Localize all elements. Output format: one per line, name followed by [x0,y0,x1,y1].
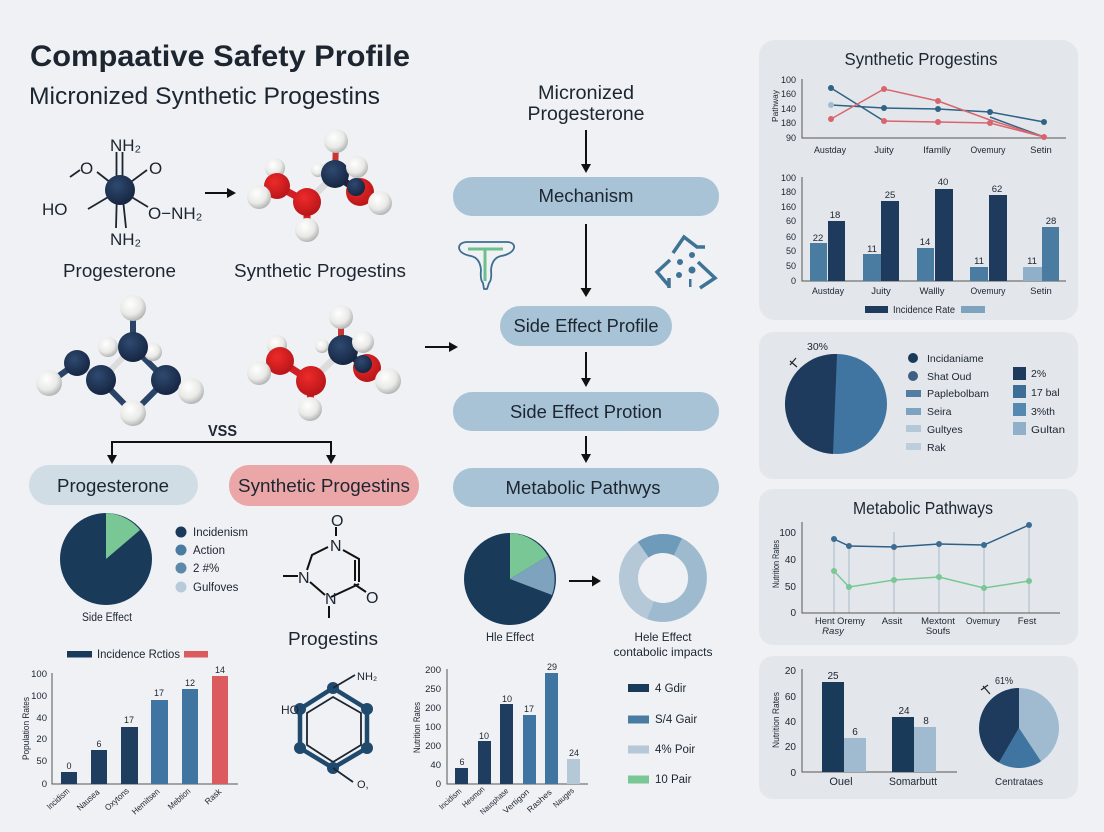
panel: metabolic pathways [759,489,1078,645]
bar chart: 11 [974,256,984,267]
heading: Synthetic Progestins [844,49,998,69]
label: micronized progesterone: Micronized [538,83,634,104]
bar chart: center: 10 [502,694,512,704]
vss branching arrows: VSS [208,423,237,440]
bar chart: center: 10 [479,731,489,741]
legend: side effect: Action [193,545,225,557]
title [29,40,410,110]
vss branching arrows [107,423,336,464]
title: Compaative Safety Profile [30,40,410,73]
pill: synthetic progestins [229,465,419,506]
bar chart: incidence ratios: 0 [42,779,47,790]
bar chart: Nutrition Rates [771,692,781,748]
line chart: Assit [882,616,903,627]
pie chart: hle effect [464,533,556,644]
molecule: ring structure: O [331,513,343,530]
bar chart: 22 [813,233,823,244]
bar chart: 60 [785,692,796,703]
pill: metabolic pathways: Metabolic Pathwys [506,477,660,498]
line chart: Mextont [921,616,955,627]
pill: side effect protion: Side Effect Protion [510,401,662,422]
bar chart: center [412,662,588,816]
arrow: to side effect profile [425,342,458,352]
line chart: 140 [781,104,796,114]
pill: progesterone: Progesterone [57,475,169,496]
molecule: ring structure [283,513,378,618]
panel: bottom right [759,656,1078,799]
bar chart: 14 [920,237,930,248]
molecule: synthetic progestin 3D top [247,129,392,242]
line chart: 0 [790,608,796,619]
molecule: ring structure: N [298,570,310,587]
bar chart: 20 [785,666,796,677]
legend: side effect [176,526,248,594]
molecule: progesterone formula: NH₂ [110,230,141,249]
line chart: Rasy [822,626,845,637]
bar chart: incidence ratios: Nausea [75,787,102,812]
bar chart: 60 [786,232,796,242]
line chart: Juity [874,145,894,156]
bar chart: center: 17 [524,704,534,714]
bar chart: 11 [867,244,877,255]
pie chart [785,342,887,454]
line chart [771,522,1060,637]
bar chart: center: Incidism [437,787,464,811]
molecule: progesterone 3D [36,295,204,426]
bar chart: incidence ratios: 100 [31,669,47,680]
bar chart: center: 40 [430,760,441,771]
molecule: benzene ring [281,671,377,791]
bar chart: incidence ratios: 100 [31,691,47,702]
bar chart: center: Vertigon [501,787,531,815]
bar chart: incidence ratios [21,647,238,816]
bar chart: center: 0 [436,779,441,790]
legend: side effect: 2 #% [193,563,219,575]
bar chart: center: Nutrition Rates [412,702,422,753]
bar chart: center: 200 [425,703,441,714]
bar chart: incidence ratios: 0 [66,761,72,771]
flow arrow [580,224,592,297]
pill: side effect profile [500,306,672,346]
pie chart: hle effect: Hle Effect [486,632,535,644]
bar chart: center: Nausphase [478,786,511,816]
legend: side effect: Incidenism [193,527,248,539]
bar chart: 180 [781,187,796,197]
legend left: Shat Oud [927,371,972,383]
bar chart: 0 [790,768,796,779]
bar chart: center: 6 [459,757,465,767]
line chart: Hent Oremy [815,616,865,627]
heading: Metabolic Pathways [853,498,993,518]
legend left: Rak [927,442,946,454]
label: hele effect [614,630,712,659]
pie chart: 30% [807,342,828,353]
legend left: Seira [927,406,952,418]
bar chart: 24 [898,706,910,717]
legend: center [628,683,697,786]
bar chart: 6 [852,727,858,738]
panel: pie and legend [759,332,1078,479]
bar chart: 25 [827,671,839,682]
bar chart: center: 100 [425,722,441,733]
label: progestins: Progestins [288,628,378,649]
bar chart: 18 [830,210,840,221]
molecule: benzene ring: O, [357,779,369,791]
molecule: progesterone formula [42,136,202,249]
bar chart: center: 29 [547,662,557,672]
icon: uterus [459,242,514,289]
bar chart: 0 [791,276,796,286]
legend left: Paplebolbam [927,388,989,400]
legend left: Incidaniame [927,353,984,365]
legend right [1013,367,1065,436]
line chart: Soufs [926,626,950,637]
bar chart: incidence ratios: Incidism [45,786,71,811]
label: hele effect: contabolic impacts [614,645,712,659]
flow arrow [581,352,591,387]
bar chart: 20 [785,742,796,753]
molecule: progesterone formula: O−NH₂ [148,204,202,223]
legend: side effect: Gulfoves [193,582,239,594]
line chart: 180 [781,118,796,128]
bar chart: center: Rashes [525,788,554,814]
bar chart: Juity [871,286,891,297]
legend: center: 10 Pair [655,774,692,786]
bar chart: incidence ratios: 17 [124,715,134,725]
pill: side effect profile: Side Effect Profile [514,315,658,336]
line chart: 100 [781,75,796,85]
label: micronized progesterone [528,83,644,125]
bar chart: incidence ratios: Population Rates [21,697,31,760]
line chart: 90 [786,133,796,143]
bar chart: incidence ratios: Mebtion [166,786,193,811]
bar chart: incidence ratios: Incidence Rctios [97,647,180,661]
line chart: Ovemury [970,145,1006,156]
bar chart: center: Hesmon [460,785,486,809]
pie chart: side effect: Side Effect [82,612,133,624]
icon: recycle cells [657,237,715,288]
line chart [771,75,1066,156]
pill: metabolic pathways [453,468,719,507]
line chart: Fest [1018,616,1037,627]
line chart: 100 [779,528,796,539]
bar chart: Somarbutt [889,776,937,788]
line chart: Ifamlly [923,145,951,156]
legend: center: 4 Gdir [655,683,686,695]
bar chart: center: 24 [569,748,579,758]
label: hele effect: Hele Effect [634,630,692,644]
label: synthetic progestins: Synthetic Progestins [234,260,406,281]
bar chart: 100 [781,173,796,183]
legend right: 17 bal [1031,387,1060,399]
label: progesterone: Progesterone [63,260,176,281]
label: micronized progesterone: Progesterone [528,104,644,125]
molecule: ring structure: O [366,590,378,607]
donut chart [628,534,707,622]
molecule: ring structure: N [330,538,342,555]
bar chart: incidence ratios: Rask [203,786,224,806]
bar chart: incidence ratios: 14 [215,665,225,675]
bar chart: center: 200 [425,741,441,752]
bar chart: Austday [812,286,844,297]
pie chart: Centrataes [995,776,1043,788]
legend left [906,353,989,454]
bar chart [771,666,957,788]
line chart: 40 [785,555,796,566]
line chart: Ovemury [966,616,1000,627]
bar chart: incidence ratios: 12 [185,678,195,688]
pill: mechanism: Mechanism [538,185,634,206]
pill: synthetic progestins: Synthetic Progestins [238,475,410,496]
bar chart: center: 250 [425,684,441,695]
legend right: 3%th [1031,406,1055,418]
bar chart: 40 [785,717,796,728]
bar chart: 160 [781,202,796,212]
bar chart: incidence ratios: 20 [36,734,47,745]
bar chart: incidence ratios: 17 [154,688,164,698]
bar chart: 50 [786,261,796,271]
bar chart: 60 [786,216,796,226]
bar chart: incidence ratios: 50 [36,756,47,767]
bar chart: center: Nauges [551,786,576,809]
pill: side effect protion [453,392,719,431]
molecule: progesterone formula: O [149,159,162,178]
molecule: benzene ring: HO [281,703,299,717]
panel: synthetic progestins charts [759,40,1078,320]
bar chart [781,173,1066,316]
line chart: Setin [1030,145,1052,156]
bar chart: 11 [1027,256,1037,267]
title: Micronized Synthetic Progestins [29,83,380,110]
bar chart: 62 [992,184,1002,195]
bar chart: 25 [885,190,895,201]
flow arrow [581,436,591,463]
pie chart [979,676,1059,788]
bar chart: 40 [938,177,948,188]
legend right: Gultan [1031,424,1065,436]
bar chart: incidence ratios: 40 [36,713,47,724]
legend right: 2% [1031,368,1046,380]
pie chart: side effect [60,513,152,624]
bar chart: Ouel [829,776,853,788]
molecule: progesterone formula: HO [42,200,68,219]
legend: center: S/4 Gair [655,714,697,726]
molecule: progesterone formula: O [80,159,93,178]
bar chart: incidence ratios: Oxytons [103,786,131,812]
bar chart: incidence ratios: 6 [96,739,102,749]
legend: center: 4% Poir [655,744,695,756]
bar chart: 28 [1046,216,1056,227]
bar chart: center: 200 [425,665,441,676]
line chart: Pathway [771,90,780,122]
bar chart: Incidence Rate [893,305,955,316]
arrow [205,188,236,198]
bar chart: incidence ratios: Hemitsen [130,786,162,816]
pill: progesterone [29,465,198,505]
molecule: benzene ring: NH₂ [357,671,377,683]
line chart: 50 [785,582,796,593]
bar chart: 8 [923,716,929,727]
bar chart: Setin [1030,286,1052,297]
pie chart: 61% [995,676,1013,687]
line chart: Austday [814,145,846,156]
legend left: Gultyes [927,424,963,436]
arrow [569,576,601,586]
bar chart: Wallly [920,286,945,297]
pill: mechanism [453,177,719,216]
flow arrow [581,130,591,173]
molecule: synthetic progestin 3D bottom [247,305,401,421]
line chart: Nutrition Rates [771,540,781,588]
bar chart: 50 [786,246,796,256]
molecule: progesterone formula: NH₂ [110,136,141,155]
bar chart: Ovemury [970,286,1006,297]
molecule: ring structure: N [325,591,337,608]
line chart: 160 [781,89,796,99]
